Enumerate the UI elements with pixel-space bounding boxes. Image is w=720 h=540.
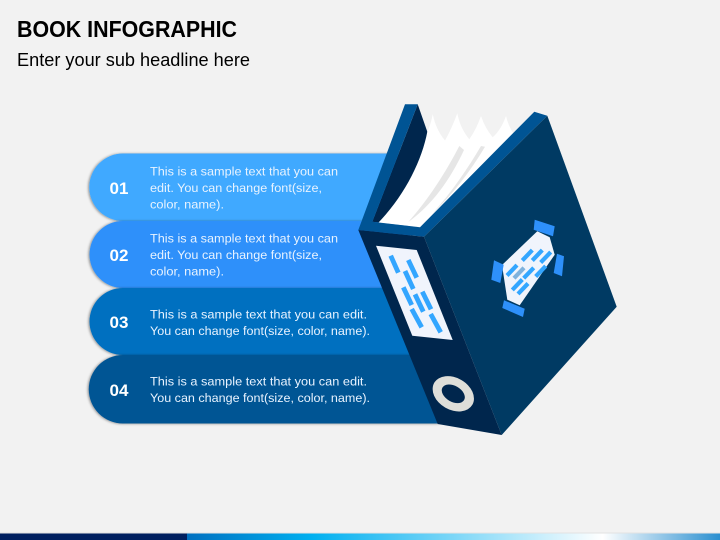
list of four items — [89, 154, 440, 424]
spine — [358, 230, 502, 435]
item 02: edit. You can change font(size, — [150, 248, 322, 262]
item 02: This is a sample text that you can — [150, 232, 338, 246]
title: BOOK INFOGRAPHIC — [17, 16, 237, 42]
cover frame — [358, 104, 547, 237]
item 03: This is a sample text that you can edit. — [150, 308, 367, 322]
icon: book — [358, 104, 617, 435]
pages — [378, 113, 513, 227]
item 03: 03 — [110, 313, 128, 332]
back cover inside — [372, 104, 430, 227]
item 03: You can change font(size, color, name). — [150, 324, 370, 338]
cover emblem — [491, 220, 564, 317]
item 02: 02 — [110, 246, 128, 265]
spine ring — [426, 369, 480, 419]
item 01: This is a sample text that you can — [150, 164, 338, 178]
item 01: edit. You can change font(size, — [150, 181, 322, 195]
item 02: color, name). — [150, 264, 224, 278]
item 04 — [89, 355, 440, 424]
item 04: You can change font(size, color, name). — [150, 391, 370, 405]
item 01 — [89, 154, 400, 221]
spine label — [376, 246, 453, 340]
item 03 — [89, 288, 425, 355]
front cover — [424, 116, 617, 435]
item 01: color, name). — [150, 198, 224, 212]
sub headline: Enter your sub headline here — [17, 49, 250, 70]
page shadow lines — [408, 146, 464, 222]
item 02 — [90, 221, 410, 288]
item 04: This is a sample text that you can edit. — [150, 374, 367, 388]
item 04: 04 — [110, 381, 129, 400]
footer bar — [0, 532, 720, 540]
item 01: 01 — [110, 179, 128, 198]
